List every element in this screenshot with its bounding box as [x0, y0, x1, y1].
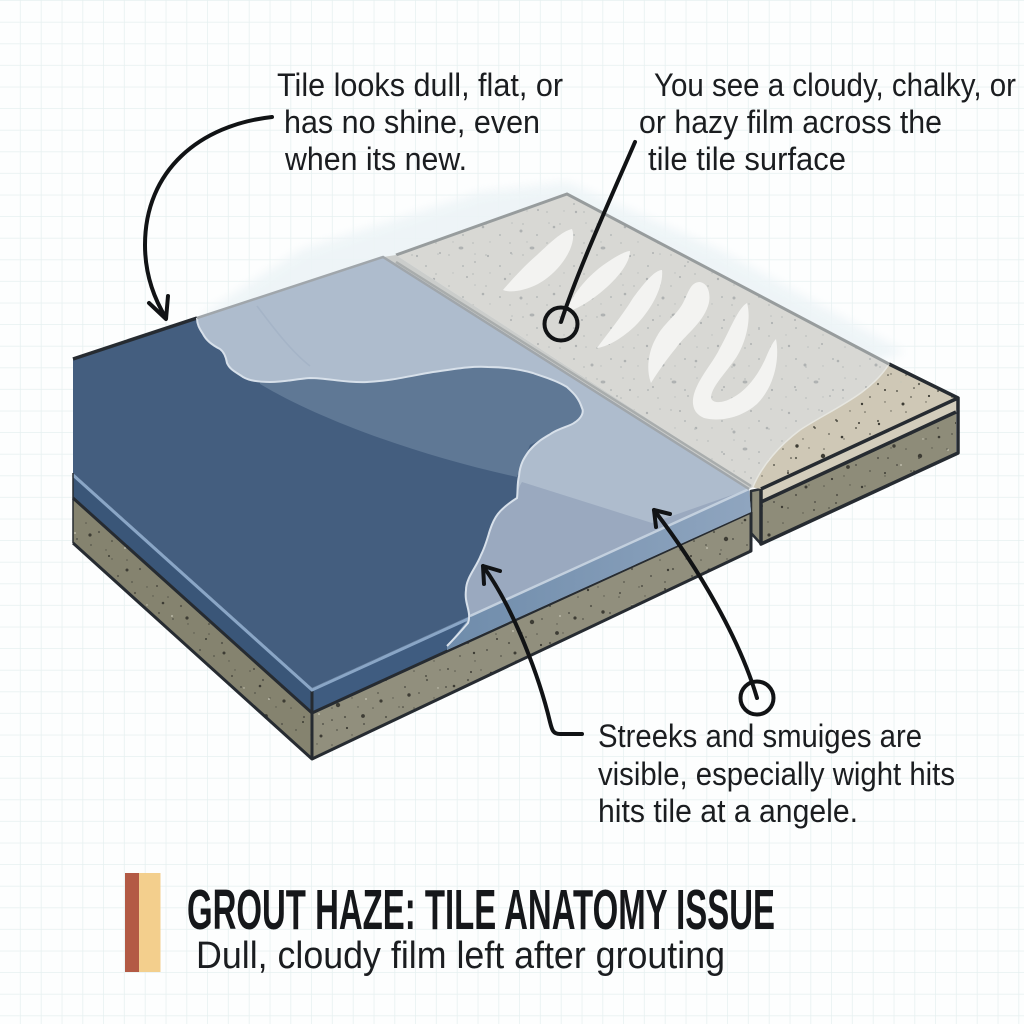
arrow: curved arrow to blue tile edge [145, 117, 272, 319]
callout: cloudy film [544, 67, 1016, 340]
blue tile side and mortar base [73, 473, 751, 759]
callout: streaks and smudges [483, 510, 955, 829]
callout text: dull tile: has no shine, even [284, 104, 540, 140]
color accent bar [125, 873, 160, 972]
callout text: cloudy film: or hazy film across the [639, 104, 942, 140]
title block [125, 873, 775, 977]
right slab: mortar base and tile edge [720, 350, 958, 544]
callout text: streaks: visible, especially wight hits [598, 756, 955, 792]
arrow: from circle to haze near tile edge [654, 510, 774, 714]
blue glazed tile top [73, 257, 749, 690]
cloudy haze film over blue tile [197, 257, 751, 650]
callout text: dull tile: when its new. [284, 141, 467, 177]
arrow: elbow line to haze edge [483, 566, 582, 734]
callout text: streaks: hits tile at a angele. [598, 793, 858, 829]
haze halo above tiles [197, 182, 905, 400]
callout text: dull tile: Tile looks dull, flat, or [277, 67, 563, 103]
callout: dull tile [145, 67, 563, 319]
concrete-look tile with chalky film [383, 194, 889, 489]
subtitle: Dull, cloudy film left after grouting [196, 935, 725, 977]
callout text: streaks: Streeks and smuiges are [598, 718, 922, 754]
lighter sheen band on blue tile [260, 355, 595, 477]
arrow: line to circled point on concrete tile [544, 142, 635, 340]
callout text: cloudy film: tile tile surface [648, 141, 846, 177]
tile anatomy diagram [73, 182, 958, 759]
white streaks and smudges [503, 229, 777, 419]
